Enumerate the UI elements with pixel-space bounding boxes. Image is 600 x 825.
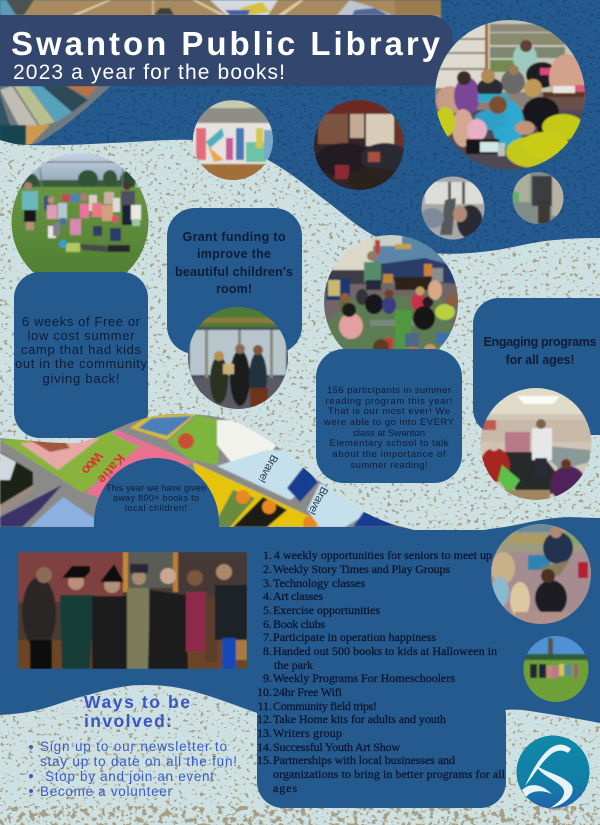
panel: summer camp text: camp that had kids	[21, 342, 142, 357]
icon: Swanton library swan logo	[516, 736, 590, 808]
panel: grant funding	[167, 208, 302, 354]
panel: ways to be involved: involved:	[84, 711, 172, 731]
list items: Take Home kits for adults and youth	[273, 712, 446, 726]
list items: 10.	[257, 685, 272, 699]
panel: summer reading text: reading program this year!	[326, 396, 452, 407]
photo: kids with a visitor and animal	[489, 522, 593, 626]
panel: grant funding: beautiful children's	[175, 265, 293, 279]
list items: 9.	[263, 671, 272, 685]
list items: 1.	[263, 548, 272, 562]
list items: 11.	[257, 699, 272, 713]
panel: ways to be involved	[29, 692, 237, 799]
panel: summer camp text: out in the community	[15, 356, 148, 371]
photo: kids on beanbags in library	[435, 20, 585, 170]
list items: Participate in operation happiness	[273, 630, 436, 644]
heading: Ways to be	[84, 692, 190, 712]
panel: summer camp text: low cost summer	[28, 328, 135, 343]
list items: 7.	[263, 630, 272, 644]
photo: Halloween event crowd	[314, 100, 404, 190]
panel: summer reading text: class at Swanton	[353, 428, 425, 439]
photo: blurred indoor scene	[512, 172, 564, 224]
photo: Kind mural	[190, 100, 276, 182]
title banner	[0, 15, 453, 86]
panel: books given away: local children!	[125, 503, 187, 513]
panel: summer reading text	[316, 349, 462, 483]
list items: organizations to bring in better programs for all	[273, 767, 506, 781]
panel: engaging programs: Engaging programs	[484, 335, 597, 349]
panel: summer reading text: That is our most ever! We	[328, 406, 450, 417]
list items: Book clubs	[273, 617, 325, 631]
list items: Art classes	[273, 589, 323, 603]
list items: 24hr Free Wifi	[273, 685, 343, 699]
list items: Writers group	[273, 726, 342, 740]
list items: Community field trips!	[273, 699, 377, 713]
photo: story time on carpet	[324, 235, 458, 350]
list items: 2.	[263, 562, 272, 576]
person: woman in grey	[121, 182, 135, 225]
person: black cloak	[215, 564, 247, 669]
panel: summer reading text: summer reading!	[350, 460, 428, 471]
person: green witch	[60, 566, 94, 669]
panel: summer reading text: about the importance of	[332, 449, 446, 460]
panel: books given away: away 800+ books to	[113, 493, 199, 503]
text on book: Brave: Brave!	[255, 453, 280, 485]
child lying on grass	[59, 240, 130, 252]
panel: list of programs	[257, 548, 506, 808]
list items: Successful Youth Art Show	[273, 740, 400, 754]
panel: summer reading text: Elementary school to talk	[330, 438, 449, 449]
person: reader in green	[364, 251, 381, 290]
photo: cardboard book boxes header	[0, 0, 441, 20]
photo: grant cheque presentation	[186, 305, 290, 412]
panel: summer reading text: 156 participants in summer	[327, 385, 451, 396]
list items: 4 weekly opportunities for seniors to meet up	[274, 548, 492, 562]
panel: summer camp text: giving back!	[42, 371, 120, 386]
person: black gown	[148, 568, 188, 669]
list items: Handed out 500 books to kids at Halloween in	[273, 644, 497, 658]
panel: engaging programs: for all ages!	[506, 353, 574, 367]
list items: Weekly Programs For Homeschoolers	[273, 671, 455, 685]
subtitle: 2023 a year for the books!	[13, 61, 285, 84]
person: red dress	[186, 570, 217, 662]
person: woman in black	[22, 567, 56, 669]
text on second book: Brave: Brave!	[305, 485, 330, 517]
panel: grant funding: room!	[216, 282, 252, 296]
panel: summer camp text: 6 weeks of Free or	[22, 314, 141, 329]
list items: 12.	[257, 712, 272, 726]
panel: engaging programs	[473, 298, 600, 435]
person: woman in teal	[22, 182, 38, 230]
photo: adult program room	[478, 386, 594, 502]
photo: staff in witch costumes	[18, 552, 247, 669]
list items: ages	[273, 781, 297, 795]
bullet list: Stop by and join an event	[45, 769, 214, 784]
bullet list: stay up to date on all the fun!	[40, 754, 237, 769]
list items: 13.	[257, 726, 272, 740]
list items: Exercise opportunities	[273, 603, 380, 617]
texture: dark blue speckle	[0, 0, 600, 300]
panel: summer camp text	[14, 272, 148, 438]
list items: 5.	[263, 603, 272, 617]
panel: grant funding: Grant funding to	[182, 230, 286, 244]
photo: summer camp group	[12, 153, 148, 273]
list items: the park	[274, 658, 313, 672]
background: upper light wave with tan speckle	[0, 130, 600, 530]
panel: summer reading text: were able to go into EVERY	[323, 417, 455, 428]
panel: books given away	[94, 458, 219, 527]
photo: kids on a bus	[422, 176, 484, 240]
text on book: Katie: Katie	[95, 451, 128, 487]
text on book: Woo: Woo	[79, 449, 106, 478]
title: Swanton Public Library	[11, 25, 441, 62]
list items: Partnerships with local businesses and	[273, 753, 455, 767]
panel: books given away: This year we have given	[106, 483, 206, 493]
photo: outdoor field group	[522, 635, 590, 704]
list items	[257, 548, 506, 795]
list items: Weekly Story Times and Play Groups	[273, 562, 450, 576]
list items: 15.	[257, 753, 272, 767]
person: jumpsuit	[127, 564, 149, 669]
photo: books giveaway wave	[0, 410, 410, 530]
background: lower light wave with tan speckle	[0, 680, 600, 825]
list items: 3.	[263, 576, 272, 590]
bullet list: Become a volunteer	[40, 784, 172, 799]
bullet list	[29, 739, 237, 799]
list items: 14.	[257, 740, 272, 754]
panel: grant funding: improve the	[197, 247, 271, 261]
person: black robe witch	[92, 564, 130, 669]
bullet list: Sign up to our newsletter to	[40, 739, 227, 754]
photo: book spines corner	[0, 86, 111, 146]
list items: Technology classes	[273, 576, 365, 590]
list items: 8.	[263, 644, 272, 658]
list items: 6.	[263, 617, 272, 631]
list items: 4.	[263, 589, 272, 603]
